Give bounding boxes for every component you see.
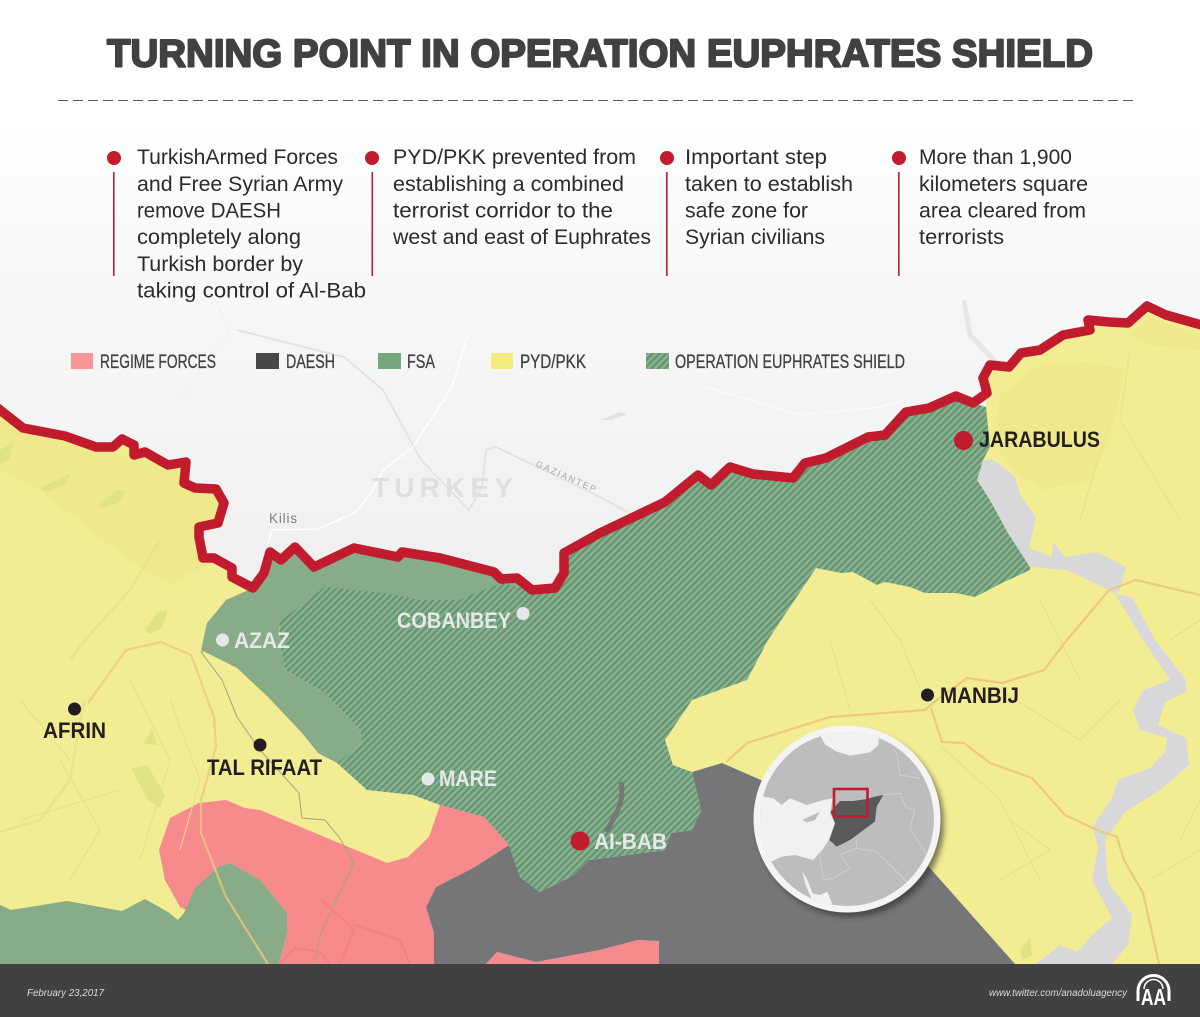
Afrin river	[0, 540, 160, 832]
Syria	[829, 795, 883, 847]
legend: PYD/PKK	[520, 352, 586, 373]
area: DAESH	[426, 763, 1015, 964]
globe map	[760, 732, 934, 906]
key point 3: taken to establish	[685, 172, 853, 196]
area: PYD/PKK darker Jarabulus patch	[995, 362, 1125, 490]
river: Euphrates lower	[1036, 594, 1189, 964]
key point 1: taking control of Al-Bab	[137, 278, 366, 302]
city: Azaz: AZAZ	[234, 628, 290, 653]
minor roads	[20, 350, 1200, 880]
globe shadow	[758, 731, 944, 917]
city: Cobanbey: COBANBEY	[397, 608, 511, 633]
city: Jarabulus: JARABULUS	[979, 427, 1100, 452]
key point 4: terrorists	[919, 225, 1004, 249]
Cyprus	[802, 812, 820, 822]
key point 1: TurkishArmed Forces	[137, 145, 338, 169]
Red Sea gulfs	[803, 872, 833, 907]
legend: OPERATION EUPHRATES SHIELD	[675, 352, 905, 373]
globe white ring	[754, 726, 940, 912]
legend: REGIME FORCES	[100, 352, 216, 373]
area: PYD/PKK west	[0, 410, 460, 930]
key point 2	[365, 145, 651, 276]
main road Manbij	[726, 580, 1200, 762]
key point 2: PYD/PKK prevented from	[393, 145, 636, 169]
label: Turkey: TURKEY	[372, 472, 513, 503]
legend: DAESH	[286, 352, 335, 373]
city: Manbij: MANBIJ	[940, 683, 1019, 708]
Aleppo city roads	[280, 900, 410, 964]
title: TURNING POINT IN OPERATION EUPHRATES SHIELD	[107, 32, 1093, 76]
city: Tal Rifaat: TAL RIFAAT	[207, 755, 323, 780]
area: regime forces south	[486, 940, 659, 964]
legend	[71, 352, 905, 373]
inset locator globe	[750, 720, 950, 920]
river inlet near Al-Bab	[606, 782, 622, 832]
country borders	[820, 752, 927, 882]
area: FSA south	[0, 863, 287, 964]
footer twitter url: www.twitter.com/anadoluagency	[989, 988, 1128, 999]
key point 3: Syrian civilians	[685, 225, 825, 249]
globe locator rectangle	[834, 789, 868, 816]
key point 4: More than 1,900	[919, 145, 1072, 169]
area: PYD/PKK east	[665, 306, 1200, 964]
city: Afrin: AFRIN	[43, 718, 106, 743]
main road south	[931, 708, 1159, 964]
map: Turkey side details	[180, 300, 996, 543]
key point 2: terrorist corridor to the	[393, 198, 613, 222]
key point 1: completely along	[137, 225, 301, 249]
Mediterranean Sea	[760, 796, 835, 862]
key point 3: safe zone for	[685, 198, 808, 222]
thin road Azaz to Al-Safira	[201, 640, 354, 964]
key point 2: west and east of Euphrates	[392, 225, 651, 249]
legend: FSA	[407, 352, 435, 373]
key point 1: and Free Syrian Army	[137, 172, 343, 196]
icon: Anadolu Agency logo: AA	[1141, 984, 1166, 1010]
key point 2: establishing a combined	[393, 172, 624, 196]
city: Mare: MARE	[439, 766, 497, 791]
city: Al-Bab: AI-BAB	[594, 829, 667, 854]
city: Afrin	[43, 702, 106, 743]
river: Euphrates upper	[977, 460, 1126, 594]
footer date: February 23,2017	[27, 988, 104, 999]
key point 4: area cleared from	[919, 198, 1086, 222]
city: Tal Rifaat	[207, 738, 323, 780]
key point 1: remove DAESH	[137, 198, 281, 222]
main road west	[88, 642, 268, 964]
page background	[0, 0, 1200, 600]
key point 1	[107, 145, 366, 302]
label: Kilis: Kilis	[269, 511, 297, 526]
dashed divider	[58, 100, 1138, 102]
key point 3: Important step	[685, 145, 827, 169]
area: FSA north	[201, 547, 532, 763]
area: Operation Euphrates Shield hatch	[279, 396, 1030, 892]
forest patches	[0, 443, 1032, 960]
area: PYD/PKK darker north-west	[0, 418, 220, 585]
area: regime forces	[159, 800, 509, 964]
area: PYD/PKK darker north-east strip	[1130, 318, 1200, 350]
map: territorial control areas	[0, 306, 1200, 964]
key point 1: Turkish border by	[137, 252, 303, 276]
label: Gaziantep: GAZIANTEP	[534, 459, 598, 494]
footer bar	[0, 964, 1200, 1017]
key point 3	[660, 145, 853, 276]
key point 4: kilometers square	[919, 172, 1088, 196]
Black Sea	[820, 732, 879, 756]
Turkish border line	[0, 306, 1200, 590]
key point 4	[892, 145, 1088, 276]
icon: Anadolu Agency logo	[1138, 976, 1169, 1010]
